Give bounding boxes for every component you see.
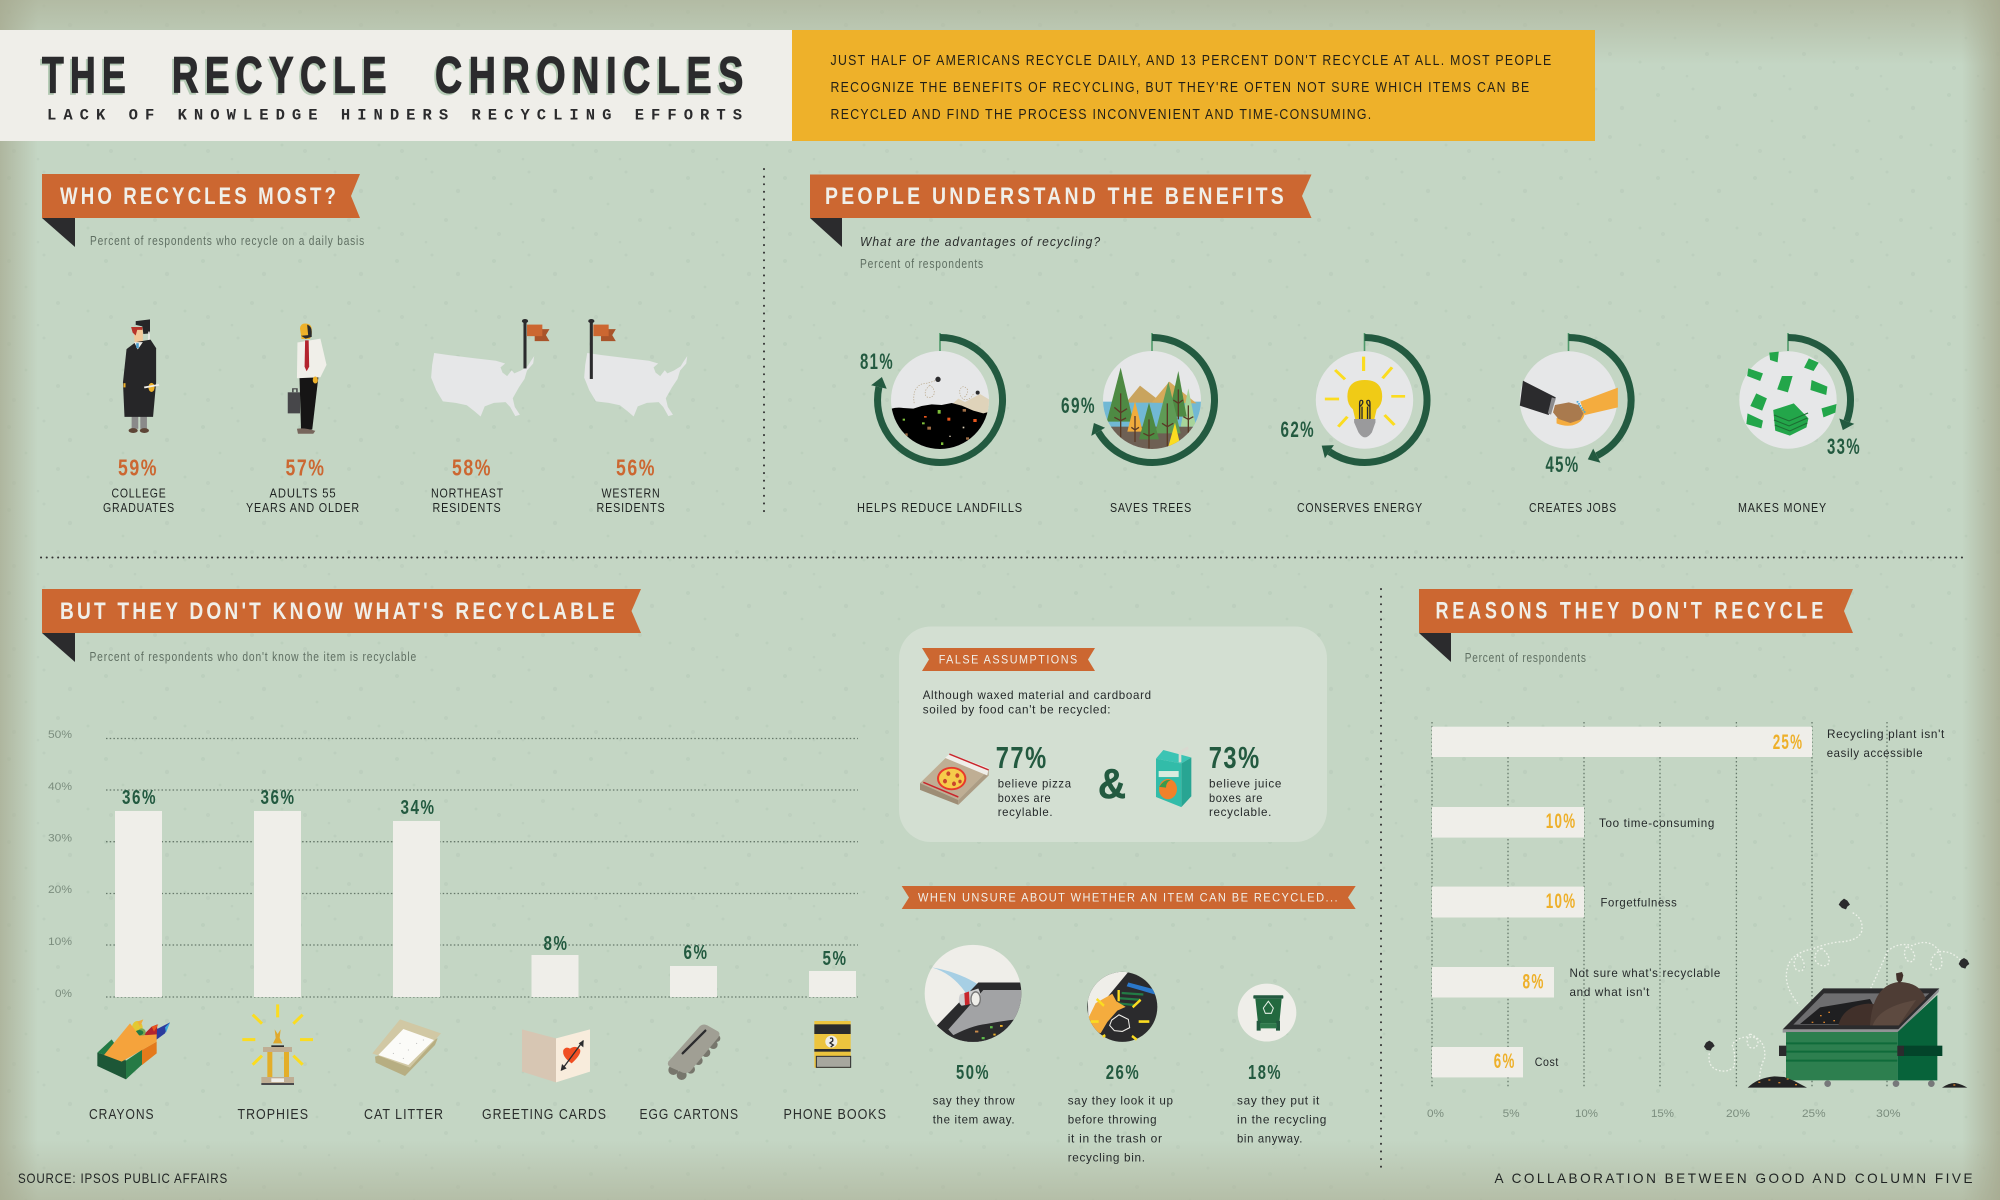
chart: saves trees ring [1091,333,1215,462]
ribbon heading [902,886,1356,909]
stat: adults 55 and older: YEARS AND OLDER [246,500,360,515]
bar labels: easily accessible [1827,746,1923,760]
panel: but they don't know what's recyclable [42,589,887,1123]
label: helps reduce landfills: HELPS REDUCE LANDFILLS [857,500,1023,515]
label: conserves energy: CONSERVES ENERGY [1297,500,1423,515]
stat: college graduates: COLLEGE [112,486,166,500]
bar values: 25% [1773,731,1803,754]
subheading: Percent of respondents who don't know the item is recyclable [90,650,417,664]
subheading: Percent of respondents [860,257,984,271]
bar values: 6% [1494,1050,1516,1073]
intro text: soiled by food can't be recycled: [923,702,1111,716]
x axis labels [1427,1108,1901,1120]
title [40,46,750,106]
stat: adults 55 and older: ADULTS 55 [270,486,336,500]
icon: cat litter [372,1019,441,1076]
bar values [122,787,848,970]
stat: 73% juice boxes: 73% [1209,740,1261,775]
stat: 62%: 62% [1280,417,1315,442]
stat: 50% [933,1062,1015,1126]
stat: 18% [1237,1062,1327,1146]
y axis labels: 50% [48,729,72,741]
icon: juice box [1156,748,1191,807]
title: THE [42,46,132,104]
chart: conserves energy ring [1316,333,1427,463]
stat: college graduates: GRADUATES [103,500,175,515]
icon: dumpster with flies [1704,899,1969,1088]
source note: SOURCE: IPSOS PUBLIC AFFAIRS [18,1170,228,1186]
stat: 81%: 81% [860,349,894,374]
stat: western residents [596,454,666,515]
stat: 77% pizza boxes [996,740,1072,819]
stat: 73% juice boxes [1209,740,1282,819]
bar labels: Forgetfulness [1600,896,1678,910]
title: CHRONICLES [433,48,748,106]
stat: 77% pizza boxes: boxes are [998,791,1051,805]
stat: northeast residents: NORTHEAST [431,486,504,500]
label: creates jobs: CREATES JOBS [1529,500,1617,515]
bar labels [1535,727,1945,1069]
stat: northeast residents: RESIDENTS [432,500,502,515]
stat: 45%: 45% [1546,452,1580,477]
y axis labels: 0% [55,988,72,1000]
item labels: PHONE BOOKS [784,1106,887,1123]
item labels: GREETING CARDS [482,1106,607,1123]
panel: who recycles most [42,174,687,515]
icon: egg carton [668,1024,720,1080]
stat: 77% pizza boxes: 77% [996,740,1048,775]
x axis labels: 15% [1651,1108,1674,1120]
icon: older adult [288,324,327,434]
stat: northeast residents: 58% [452,454,492,480]
y axis labels: 40% [48,781,72,793]
item labels: CAT LITTER [364,1106,444,1123]
icon: can thrown in trash [925,945,1023,1045]
question: What are the advantages of recycling? [860,234,1101,249]
icon: western map [584,319,687,417]
header: intro box: RECYCLED AND FIND THE PROCESS INCONVENIENT AND TIME-CONSUMING. [830,106,1372,123]
x axis labels: 25% [1802,1108,1826,1120]
y axis labels: 20% [48,884,72,896]
stat: western residents: 56% [616,454,656,480]
panel: reasons they don't recycle [1419,589,1969,1120]
item labels: TROPHIES [238,1106,309,1123]
y axis labels: 10% [48,936,72,948]
label: makes money: MAKES MONEY [1738,500,1827,515]
header: intro box: RECOGNIZE THE BENEFITS OF RECYCLING, BUT THEY'RE OFTEN NOT SURE WHICH ITEMS CAN BE [830,79,1530,96]
item labels [89,1106,887,1123]
ribbon heading: FALSE ASSUMPTIONS [939,654,1079,666]
subheading: Percent of respondents [1465,651,1587,665]
bar values: 36% [122,787,157,809]
stat: 26%: before throwing [1068,1112,1157,1126]
bar labels: and what isn't [1570,985,1650,999]
x axis labels: 10% [1575,1108,1598,1120]
stat: 73% juice boxes: believe juice [1209,776,1282,790]
y axis labels [48,729,72,1000]
title: RECYCLE [170,48,391,106]
header: title block [0,30,792,141]
ribbon heading [922,648,1095,671]
title: RECYCLE [172,46,393,104]
stat: 50%: say they throw [933,1094,1015,1108]
stat: 73% juice boxes: boxes are [1209,791,1263,805]
header: intro box: JUST HALF OF AMERICANS RECYCLE DAILY, AND 13 PERCENT DON'T RECYCLE AT ALL. MOST PEOPLE [830,52,1552,69]
stat: 73% juice boxes: recyclable. [1209,805,1272,819]
x axis labels: 5% [1503,1108,1520,1120]
bars [115,811,856,997]
chart: makes money ring [1739,333,1854,449]
bar values: 8% [1522,970,1545,994]
icon: phone books [814,1021,851,1068]
stat: adults 55 and older [246,454,360,515]
y axis labels: 30% [48,832,72,844]
chart: helps reduce landfills ring [871,333,1003,463]
stat: 69%: 69% [1061,393,1096,418]
icon: crayons [97,1019,170,1079]
heading banner: REASONS THEY DON'T RECYCLE [1436,598,1827,624]
bar values: 10% [1546,890,1576,913]
bar values: 36% [260,787,296,809]
stat: western residents: WESTERN [602,486,660,500]
bar values: 5% [822,948,848,970]
panel: people understand the benefits [810,174,1861,515]
label: saves trees: SAVES TREES [1110,500,1192,515]
intro text: Although waxed material and cardboard [923,688,1152,702]
icon: greeting card [522,1029,590,1082]
icon: pizza box [920,754,989,805]
title: CHRONICLES [435,46,750,104]
bar values: 8% [544,933,568,955]
stat: college graduates [103,454,175,515]
chart: creates jobs ring [1520,333,1631,463]
heading banner [810,174,1312,247]
icon: trophy [242,1004,313,1085]
stat: 26% [1068,1062,1174,1164]
subtitle: LACK OF KNOWLEDGE HINDERS RECYCLING EFFORTS [47,106,742,124]
bar values: 10% [1546,810,1576,833]
heading banner [1419,589,1853,662]
bar labels: Recycling plant isn't [1827,727,1945,741]
title: THE [40,48,130,106]
ampersand: & [1098,760,1126,807]
stat: 50%: the item away. [933,1112,1015,1126]
x axis labels: 30% [1876,1108,1901,1120]
stat: 26%: it in the trash or [1068,1132,1163,1146]
bar labels: Cost [1535,1055,1559,1069]
bar values: 6% [684,942,708,964]
heading banner: WHO RECYCLES MOST? [60,183,339,210]
bar labels: Too time-consuming [1599,816,1715,830]
bar chart [48,729,858,1000]
icon: looking it up [1087,972,1157,1042]
stat: 18%: in the recycling [1237,1112,1327,1126]
stat: 18%: 18% [1248,1062,1282,1084]
x axis labels: 0% [1427,1108,1444,1120]
bars [1432,727,1812,1077]
header: intro box [792,30,1595,141]
icon: northeast map [431,319,549,417]
stat: adults 55 and older: 57% [286,454,326,480]
bar values: 34% [400,797,436,819]
item labels: EGG CARTONS [640,1106,739,1123]
stat: 18%: say they put it [1237,1094,1320,1108]
horizontal bar chart [1427,722,1945,1120]
heading banner [42,589,641,662]
icon: recycling bin [1238,984,1296,1042]
stat: 50%: 50% [956,1062,990,1084]
stat: western residents: RESIDENTS [596,500,666,515]
stat: college graduates: 59% [118,454,158,480]
panel: when unsure [902,886,1356,1164]
stat: 77% pizza boxes: recylable. [998,805,1053,819]
stat: 77% pizza boxes: believe pizza [998,776,1072,790]
panel: false assumptions [899,626,1327,842]
bar values [1494,731,1803,1073]
heading banner [42,174,360,247]
stat: northeast residents [431,454,504,515]
stat: 26%: recycling bin. [1068,1150,1146,1164]
heading banner: PEOPLE UNDERSTAND THE BENEFITS [825,183,1287,210]
x axis labels: 20% [1726,1108,1750,1120]
intro text [923,688,1152,716]
heading banner: BUT THEY DON'T KNOW WHAT'S RECYCLABLE [60,598,618,625]
icon: graduate [123,319,159,433]
stat: 33%: 33% [1827,434,1861,459]
ribbon heading: WHEN UNSURE ABOUT WHETHER AN ITEM CAN BE RECYCLED... [918,893,1339,905]
credit: A COLLABORATION BETWEEN GOOD AND COLUMN FIVE [1494,1170,1975,1186]
subheading: Percent of respondents who recycle on a daily basis [90,234,365,248]
bar labels: Not sure what's recyclable [1570,966,1721,980]
item labels: CRAYONS [89,1106,154,1123]
stat: 26%: say they look it up [1068,1094,1174,1108]
stat: 26%: 26% [1106,1062,1140,1084]
stat: 18%: bin anyway. [1237,1132,1303,1146]
